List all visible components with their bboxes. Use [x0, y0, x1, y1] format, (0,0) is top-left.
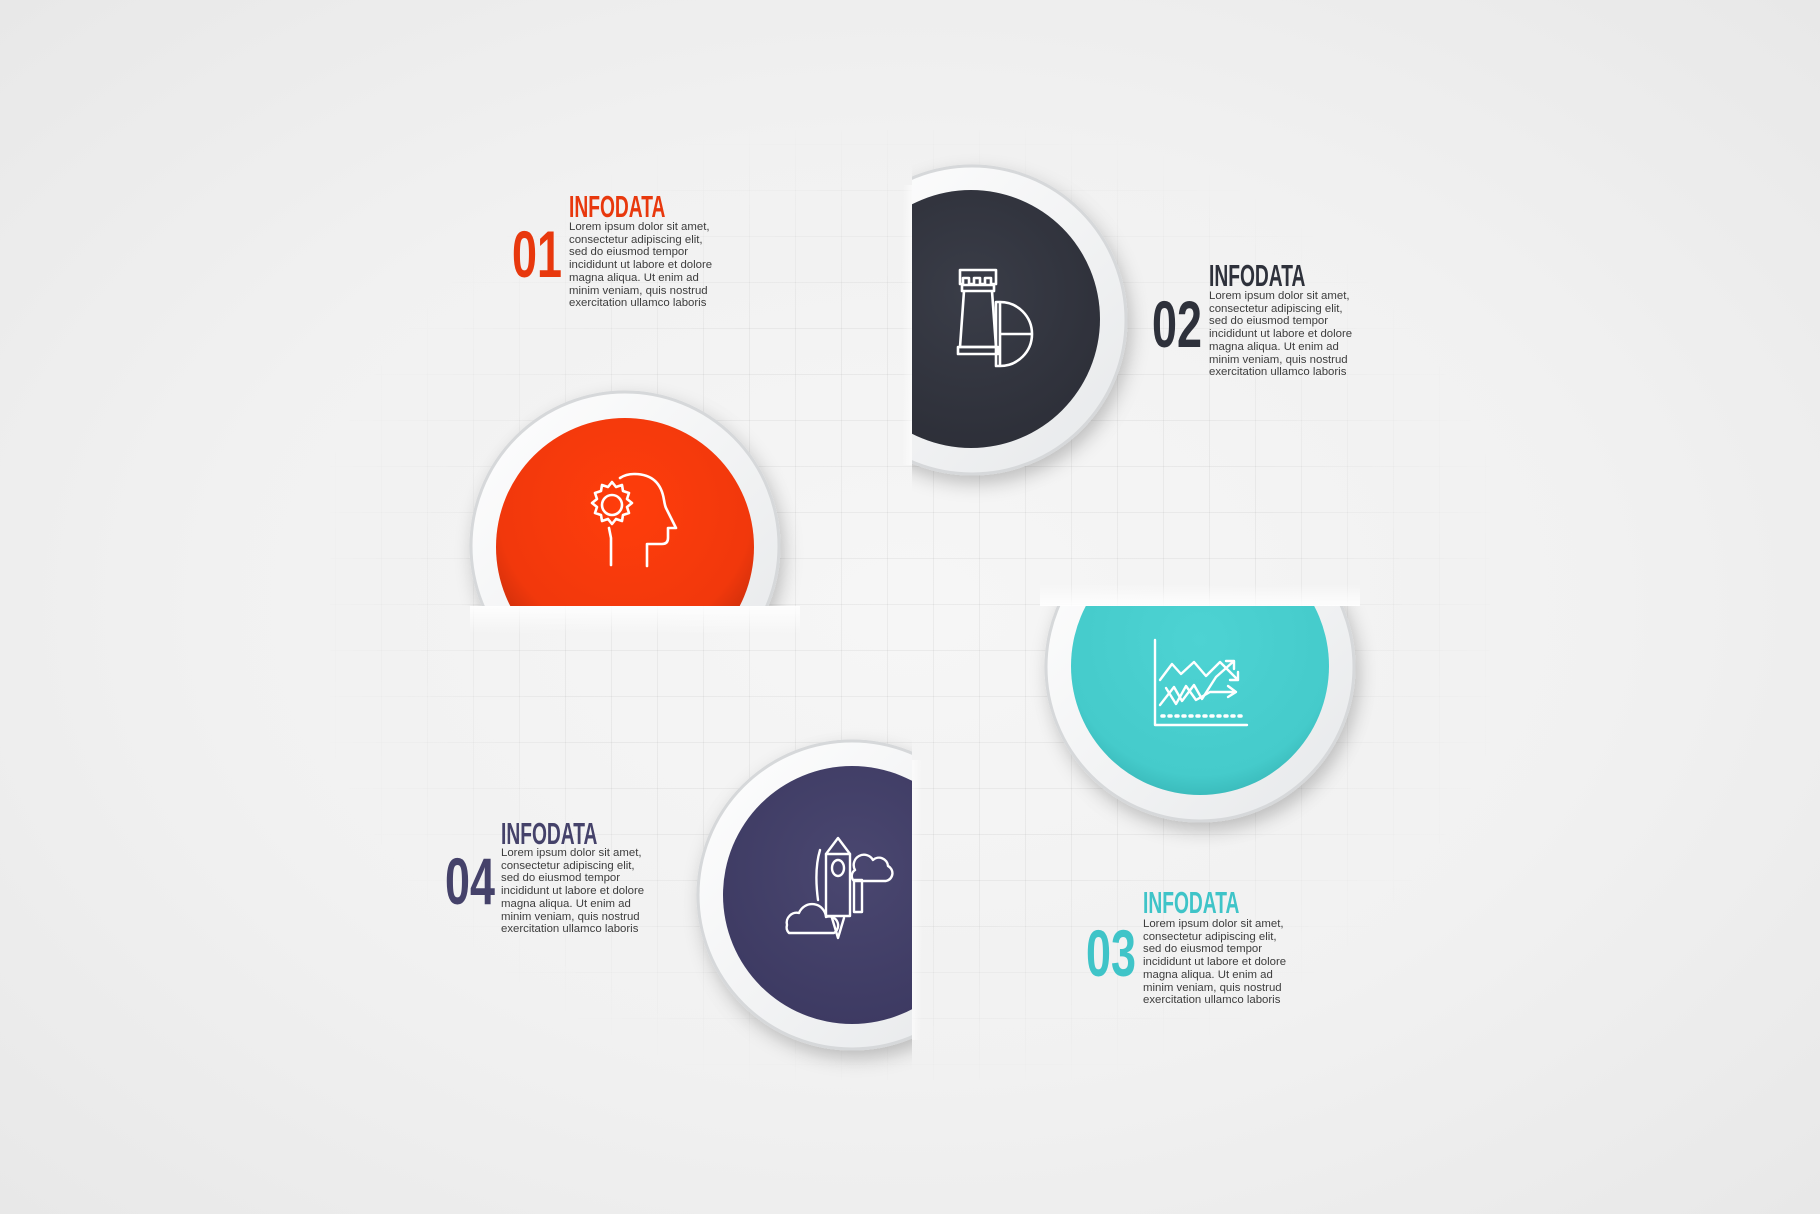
body text 2: consectetur adipiscing elit, [1209, 303, 1343, 315]
circle 1: red [464, 390, 794, 606]
body text 2: magna aliqua. Ut enim ad [1209, 341, 1339, 353]
body text 3: sed do eiusmod tempor [1143, 943, 1262, 955]
block 4 [445, 816, 644, 935]
body text 1: minim veniam, quis nostrud [569, 285, 708, 297]
body text 3: magna aliqua. Ut enim ad [1143, 969, 1273, 981]
icon: rocket with clouds [787, 838, 892, 938]
body text 2 [1209, 290, 1352, 378]
body text 2: minim veniam, quis nostrud [1209, 354, 1348, 366]
number 02: 02 [1152, 287, 1202, 361]
heading 3: INFODATA [1143, 885, 1239, 920]
circle 2: dark [912, 164, 1140, 492]
number 03: 03 [1086, 916, 1136, 990]
block 3 [1086, 885, 1286, 1006]
heading 4: INFODATA [501, 816, 597, 851]
body text 3: incididunt ut labore et dolore [1143, 956, 1286, 968]
body text 1: incididunt ut labore et dolore [569, 259, 712, 271]
body text 4: Lorem ipsum dolor sit amet, [501, 847, 642, 859]
body text 1: consectetur adipiscing elit, [569, 234, 703, 246]
body text 3 [1143, 918, 1286, 1006]
body text 1: magna aliqua. Ut enim ad [569, 272, 699, 284]
body text 4: sed do eiusmod tempor [501, 872, 620, 884]
icon: chess rook with pie [958, 270, 1032, 366]
body text 1 [569, 221, 712, 309]
heading 2: INFODATA [1209, 258, 1305, 293]
decorative paper edges [470, 606, 800, 634]
body text 2: sed do eiusmod tempor [1209, 315, 1328, 327]
body text 2: incididunt ut labore et dolore [1209, 328, 1352, 340]
body text 4: exercitation ullamco laboris [501, 923, 638, 935]
icon: line chart with arrows [1155, 640, 1247, 725]
icon: head with gear [592, 474, 676, 566]
number 04: 04 [445, 844, 495, 918]
body text 4 [501, 847, 644, 935]
body text 1: exercitation ullamco laboris [569, 297, 706, 309]
body text 3: minim veniam, quis nostrud [1143, 982, 1282, 994]
circle 4: purple [692, 738, 912, 1068]
block 2 [1152, 258, 1352, 378]
circle 3: teal [1040, 606, 1368, 840]
body text 4: minim veniam, quis nostrud [501, 911, 640, 923]
body text 3: Lorem ipsum dolor sit amet, [1143, 918, 1284, 930]
body text 4: consectetur adipiscing elit, [501, 860, 635, 872]
body text 3: consectetur adipiscing elit, [1143, 931, 1277, 943]
body text 2: Lorem ipsum dolor sit amet, [1209, 290, 1350, 302]
body text 4: magna aliqua. Ut enim ad [501, 898, 631, 910]
block 1 [512, 189, 712, 309]
heading 1: INFODATA [569, 189, 665, 224]
body text 2: exercitation ullamco laboris [1209, 366, 1346, 378]
body text 3: exercitation ullamco laboris [1143, 994, 1280, 1006]
body text 4: incididunt ut labore et dolore [501, 885, 644, 897]
number 01: 01 [512, 217, 562, 291]
body text 1: Lorem ipsum dolor sit amet, [569, 221, 710, 233]
body text 1: sed do eiusmod tempor [569, 246, 688, 258]
